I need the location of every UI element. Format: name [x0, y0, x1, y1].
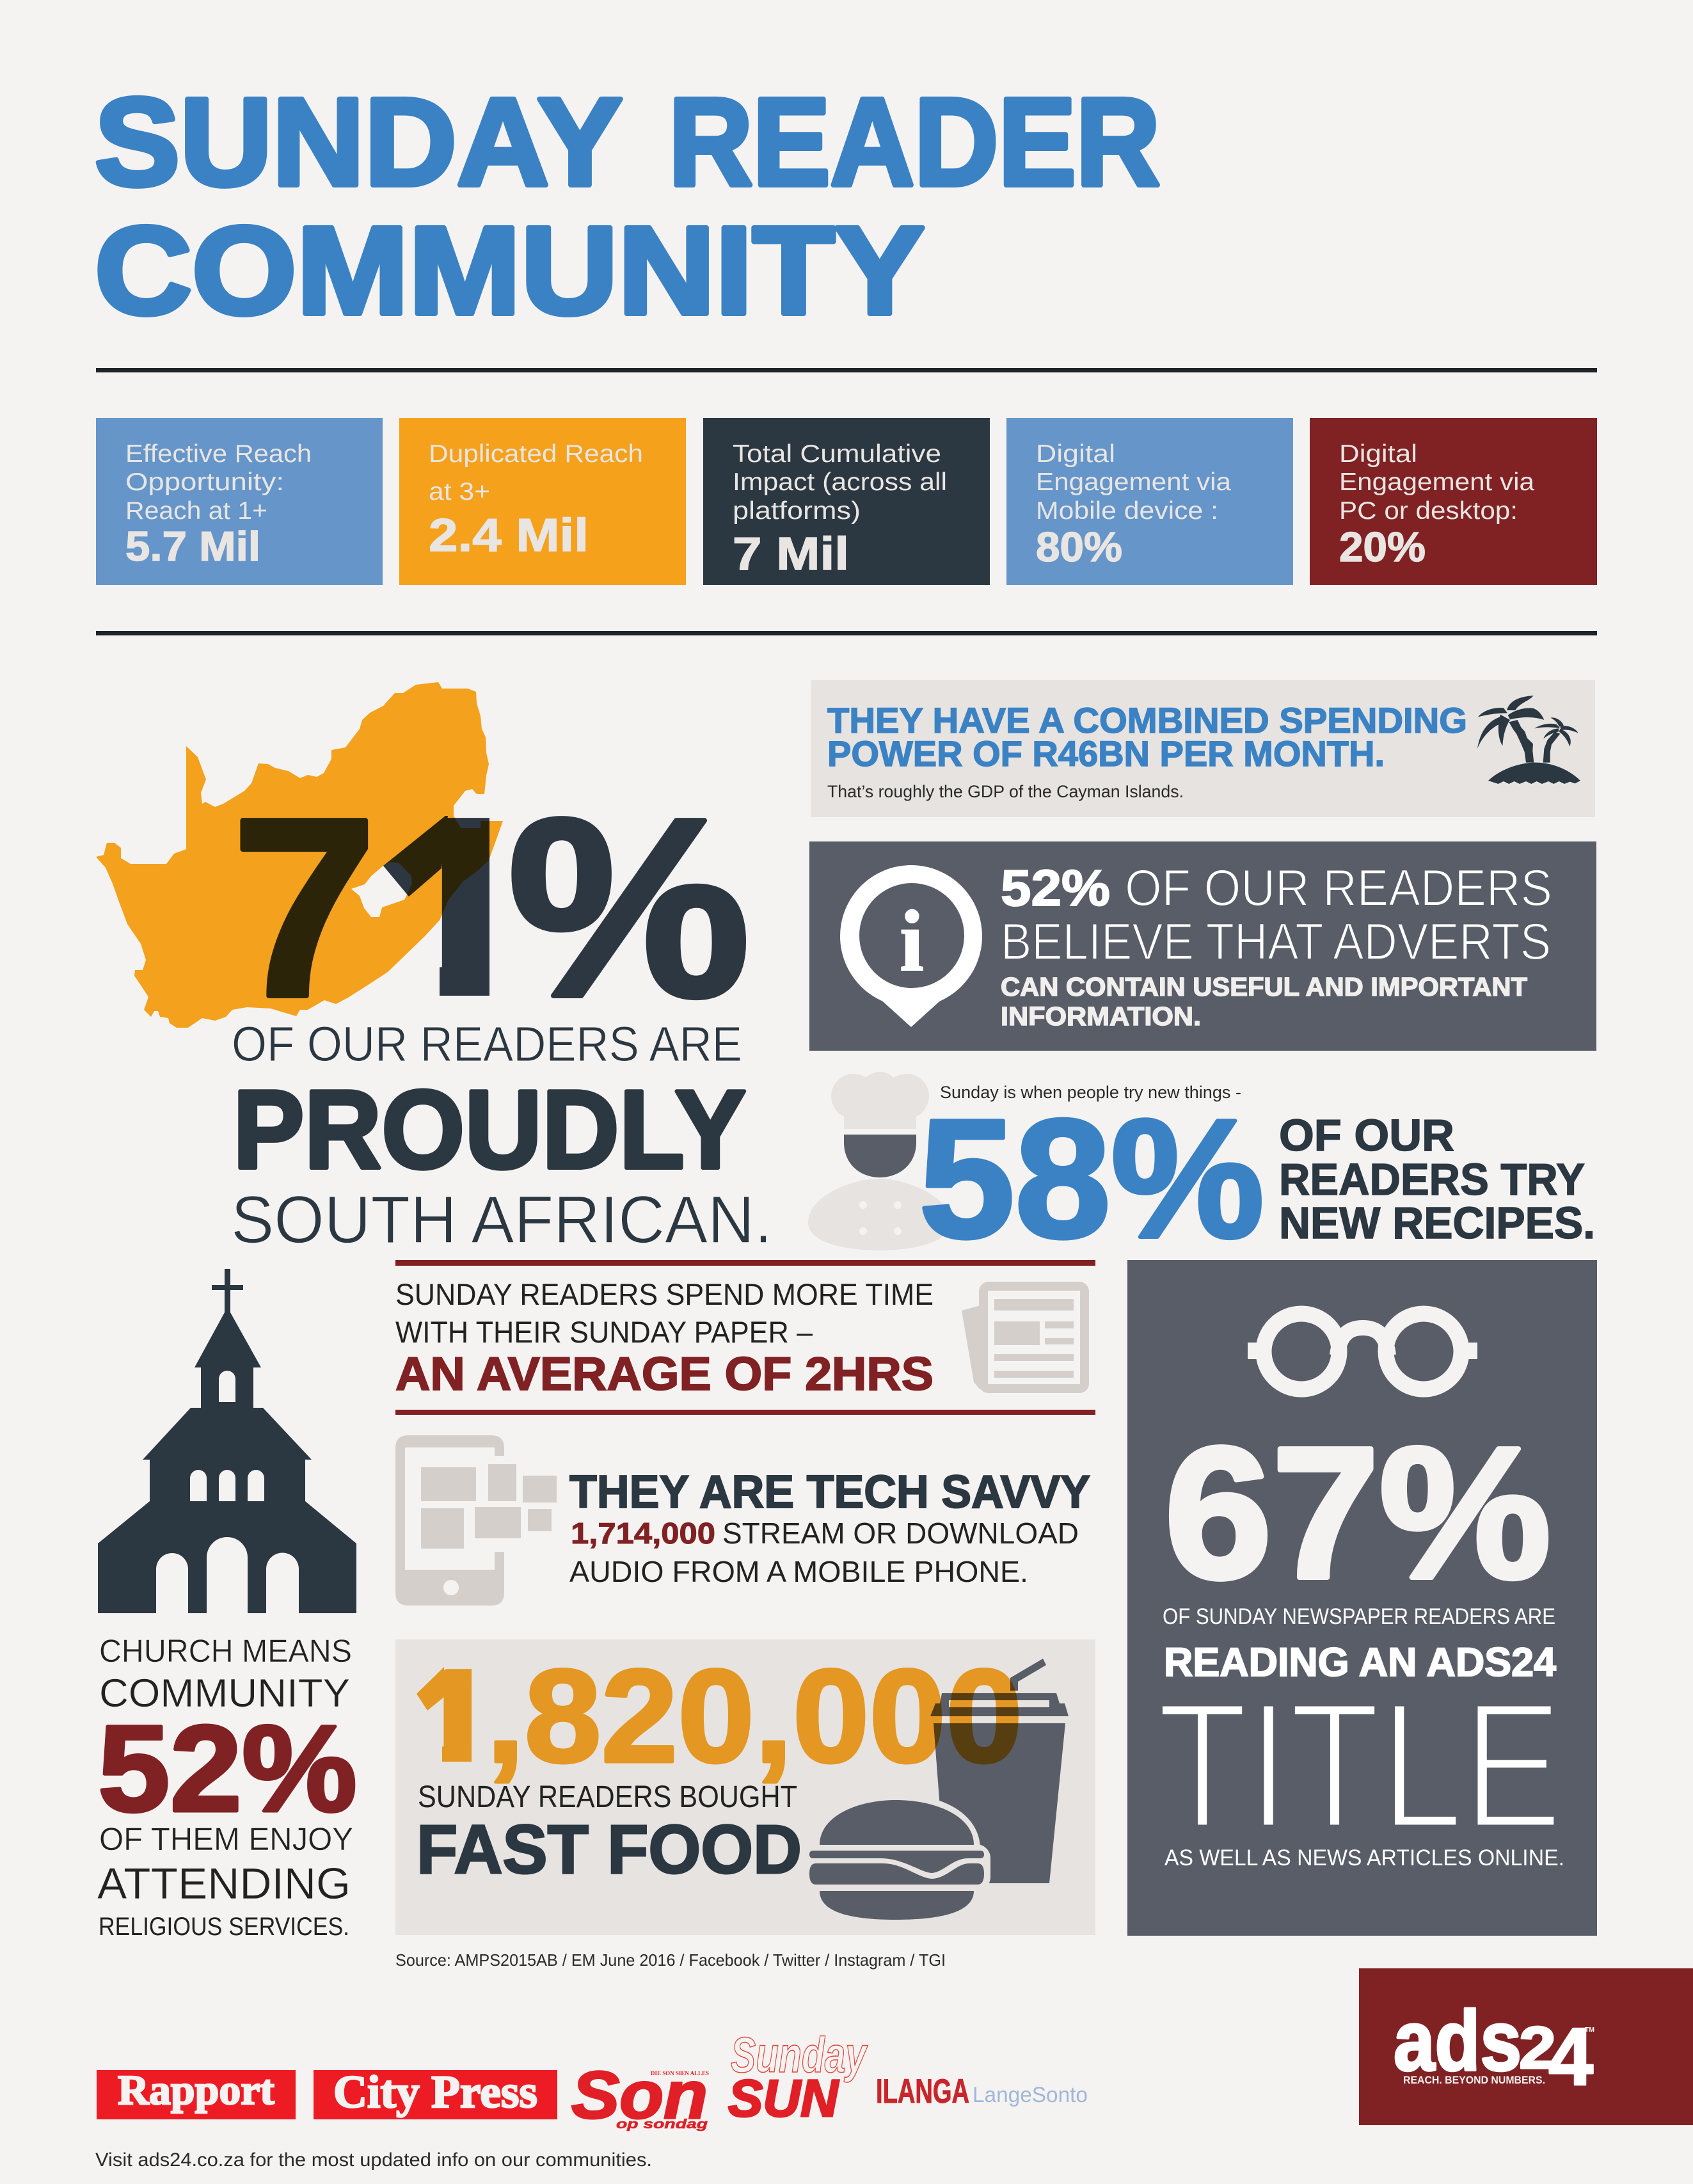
text: proudly: PROUDLY: [233, 1067, 746, 1192]
big number 71%: 1: [371, 766, 548, 1050]
icon: church: [98, 1269, 356, 1613]
heading: spending power: THEY HAVE A COMBINED SPENDING: [827, 700, 1467, 740]
text: spend more time: WITH THEIR SUNDAY PAPER –: [395, 1315, 813, 1349]
big number 71%: %: [507, 766, 751, 1050]
big number 1,820,000: [417, 1667, 1019, 1784]
big number 52%: 52%: [98, 1700, 357, 1837]
icon: info pin: [840, 865, 982, 1027]
text: news articles online: AS WELL AS NEWS ARTICLES ONLINE.: [1164, 1845, 1564, 1870]
card: effective reach: [96, 418, 383, 585]
card: effective reach: Reach at 1+: [125, 497, 267, 525]
icon: drink cup: [930, 1659, 1069, 1883]
text: useful information: CAN CONTAIN USEFUL AND IMPORTANT: [1001, 972, 1527, 1001]
card: mobile engagement: [1006, 418, 1293, 585]
title: [95, 72, 1160, 340]
logo: ads24: TM: [1585, 2027, 1594, 2034]
logo: sunday sun: Sunday: [731, 2027, 868, 2083]
text: 1,714,000: 1,714,000: [571, 1517, 715, 1550]
logo: rapport: Rapport: [118, 2067, 274, 2114]
text: try new recipes: READERS TRY: [1279, 1154, 1585, 1204]
text: community: COMMUNITY: [99, 1671, 350, 1716]
big number 67%: 67%: [1164, 1408, 1551, 1617]
card: effective reach: Opportunity:: [125, 468, 284, 496]
card: pc engagement: [1310, 418, 1597, 585]
text: stream or download: STREAM OR DOWNLOAD: [722, 1517, 1079, 1550]
logo: son op sondag: Son: [571, 2058, 708, 2133]
panel: ads24 title readers: [1127, 1260, 1597, 1936]
card: effective reach: Effective Reach: [125, 440, 312, 468]
text: cayman islands: That’s roughly the GDP of the Cayman Islands.: [827, 782, 1184, 801]
title: READER: [669, 72, 1160, 212]
card: pc engagement: PC or desktop:: [1339, 497, 1518, 525]
text: try new recipes: OF OUR: [1279, 1110, 1454, 1160]
text: useful information: [1001, 972, 1527, 1031]
text: try new recipes: [1279, 1110, 1595, 1248]
logo: rapport: [97, 2067, 296, 2119]
panel: adverts belief: [809, 841, 1596, 1051]
text: new things: Sunday is when people try new things -: [940, 1083, 1241, 1102]
card: pc engagement: 20%: [1339, 523, 1426, 570]
panel: tech savvy: [395, 1435, 1090, 1606]
panel: fast food: [395, 1639, 1095, 1935]
big number 58%: 58%: [919, 1084, 1264, 1273]
card: mobile engagement: Engagement via: [1036, 468, 1231, 496]
card: pc engagement: Engagement via: [1339, 468, 1534, 496]
logo wordmark: ads: [1394, 1994, 1522, 2089]
card: duplicated reach: 2.4 Mil: [429, 510, 589, 561]
panel: new recipes: [808, 1072, 1595, 1273]
icon: burger: [809, 1800, 984, 1920]
card: duplicated reach: [399, 418, 686, 585]
panel: reach statistics cards: [96, 418, 1597, 585]
card: pc engagement: Digital: [1339, 440, 1417, 468]
icon: glasses: [1248, 1314, 1477, 1389]
panel: spending power: [811, 680, 1595, 817]
text: fast food: FAST FOOD: [417, 1810, 802, 1888]
text: audio from phone: AUDIO FROM A MOBILE PHONE.: [569, 1555, 1028, 1588]
logo: sunday sun: SUN: [728, 2069, 839, 2128]
text: 52% of our readers: 52%: [1001, 859, 1110, 916]
card: mobile engagement: Mobile device :: [1036, 497, 1218, 525]
logo: son op sondag: DIE SON SIEN ALLES: [651, 2070, 709, 2076]
text: visit footer: Visit ads24.co.za for the most updated info on our communities.: [95, 2149, 652, 2171]
text: spend more time: SUNDAY READERS SPEND MORE TIME: [395, 1277, 934, 1311]
icon: newspaper: [962, 1286, 1085, 1390]
card: duplicated reach: at 3+: [429, 478, 490, 506]
logo wordmark: 2: [1519, 2014, 1556, 2081]
text: of them enjoy: OF THEM ENJOY: [99, 1821, 353, 1857]
heading: spending power: [827, 700, 1467, 774]
icon: palm island: [1477, 696, 1580, 784]
text: attending: ATTENDING: [97, 1859, 351, 1908]
logo: ads24: REACH. BEYOND NUMBERS.: [1403, 2074, 1545, 2086]
heading: tech savvy: THEY ARE TECH SAVVY: [569, 1467, 1090, 1518]
text: religious services: RELIGIOUS SERVICES.: [99, 1913, 349, 1941]
title: SUNDAY: [95, 72, 623, 212]
big number 71%: [240, 816, 746, 1001]
card: total cumulative impact: 7 Mil: [733, 529, 849, 580]
text: try new recipes: NEW RECIPES.: [1279, 1198, 1595, 1248]
logo: ilanga langasonto: [876, 2073, 1088, 2110]
big number 1,820,000: 1: [402, 1642, 506, 1790]
text: of our readers: OF OUR READERS: [1125, 859, 1552, 917]
text: church means: CHURCH MEANS: [99, 1633, 352, 1669]
text: reading an ads24: READING AN ADS24: [1164, 1640, 1556, 1685]
logo: ilanga langasonto: ILANGA: [876, 2073, 969, 2110]
logo: son op sondag: op sondag: [616, 2117, 708, 2132]
title: COMMUNITY: [95, 201, 925, 340]
text: title: TITLE: [1157, 1664, 1562, 1866]
text: south african: SOUTH AFRICAN.: [231, 1183, 772, 1257]
icon: phone with tiles: [395, 1435, 557, 1606]
heading: spending power: POWER OF R46BN PER MONTH.: [827, 733, 1385, 774]
map of South Africa: [96, 682, 503, 1028]
card: total cumulative impact: platforms): [733, 497, 861, 525]
text: believe that adverts: BELIEVE THAT ADVERTS: [1001, 913, 1551, 971]
text: average of 2hrs: AN AVERAGE OF 2HRS: [395, 1348, 934, 1400]
card: mobile engagement: 80%: [1036, 523, 1122, 570]
card: mobile engagement: Digital: [1036, 440, 1115, 468]
logo wordmark: 4: [1548, 2011, 1593, 2102]
text: source: Source: AMPS2015AB / EM June 2016 / Facebook / Twitter / Instagram / TGI: [395, 1950, 946, 1970]
logo: city press: City Press: [333, 2066, 537, 2117]
logo wordmark: [1394, 1994, 1593, 2102]
icon: chef: [808, 1072, 950, 1250]
card: duplicated reach: Duplicated Reach: [429, 440, 643, 468]
text: useful information: INFORMATION.: [1001, 1001, 1201, 1031]
card: total cumulative impact: Impact (across all: [733, 468, 947, 496]
card: total cumulative impact: Total Cumulative: [733, 440, 941, 468]
logo: ilanga langasonto: LangeSonto: [973, 2083, 1088, 2107]
big number 1,820,000: ,820,000: [486, 1642, 1022, 1790]
logo: ads24: [1359, 1968, 1693, 2125]
text: of sunday newspaper readers: OF SUNDAY NEWSPAPER READERS ARE: [1163, 1604, 1555, 1629]
panel: time with paper: [395, 1260, 1095, 1415]
text: spend more time: [395, 1277, 934, 1349]
panel: church: [97, 1269, 357, 1941]
text: of our readers are: OF OUR READERS ARE: [232, 1017, 742, 1072]
logos: newspaper brands: [97, 2027, 1088, 2133]
big number 71%: 7: [232, 766, 377, 1050]
logo: sunday sun: [728, 2027, 868, 2128]
card: effective reach: 5.7 Mil: [125, 523, 260, 570]
panel: proudly south african: [96, 682, 772, 1257]
card: total cumulative impact: [703, 418, 990, 585]
text: sunday readers bought: SUNDAY READERS BOUGHT: [418, 1780, 797, 1814]
icon: info pin: i: [900, 893, 924, 989]
